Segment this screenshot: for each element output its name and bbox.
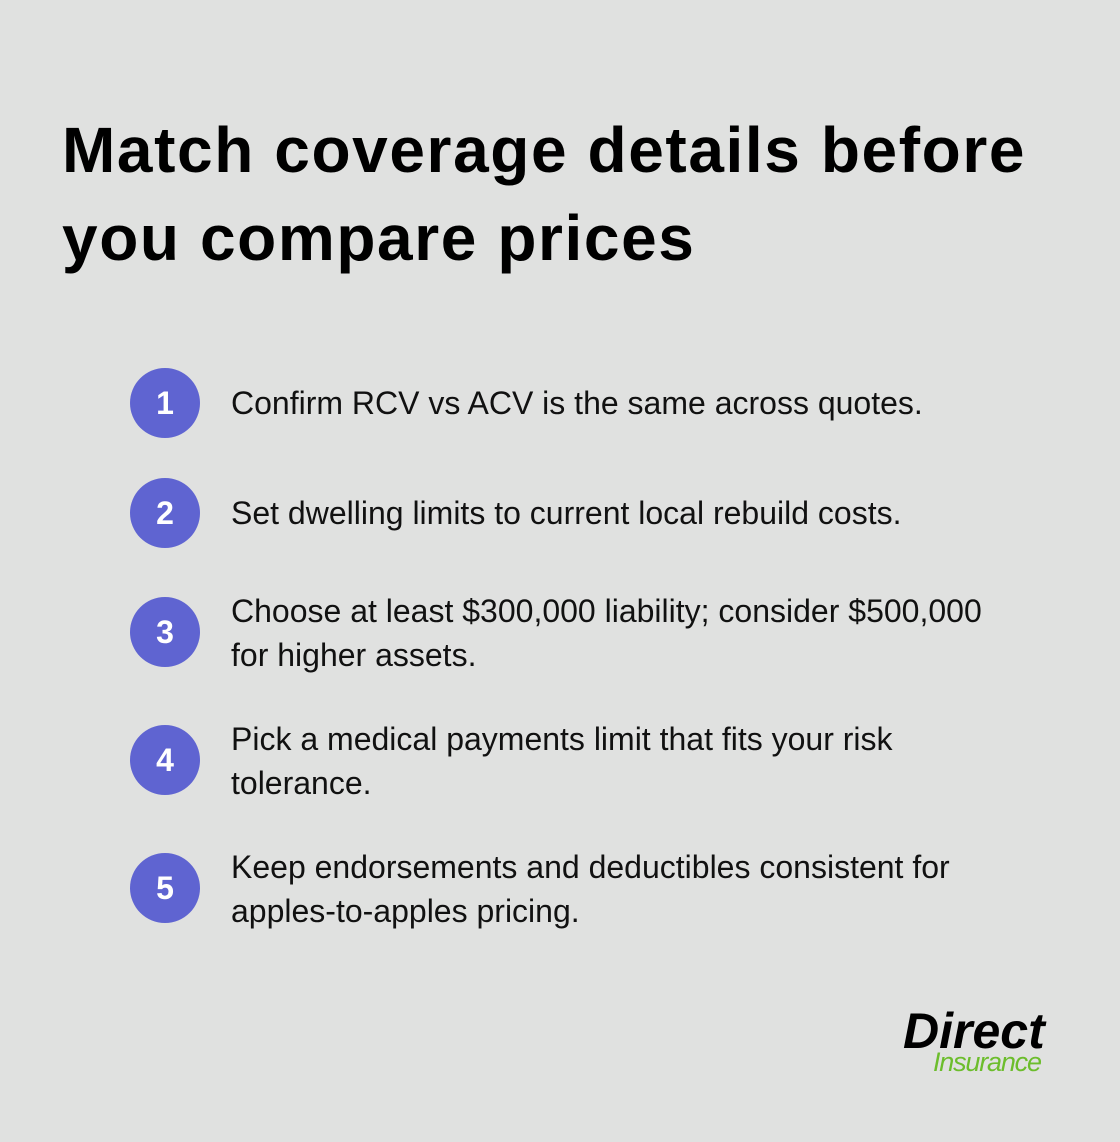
item 5: 5 bbox=[156, 870, 174, 906]
item 3: Choose at least $300,000 liability; consider $500,000 bbox=[231, 593, 982, 629]
item 4: tolerance. bbox=[231, 765, 372, 801]
item 2: 2 bbox=[156, 495, 174, 531]
item 4: 4 bbox=[156, 742, 174, 778]
title: Match coverage details before bbox=[62, 114, 1026, 186]
item 3: 3 bbox=[156, 614, 174, 650]
item 1 bbox=[130, 368, 923, 438]
item 5 bbox=[130, 849, 950, 929]
item 5: Keep endorsements and deductibles consistent for bbox=[231, 849, 950, 885]
item 4: Pick a medical payments limit that fits your risk bbox=[231, 721, 893, 757]
item 3 bbox=[130, 593, 982, 673]
item 3: for higher assets. bbox=[231, 637, 476, 673]
title bbox=[62, 114, 1026, 274]
logo: Insurance bbox=[933, 1047, 1041, 1077]
item 4 bbox=[130, 721, 893, 801]
item 2: Set dwelling limits to current local rebuild costs. bbox=[231, 495, 902, 531]
item 1: 1 bbox=[156, 385, 174, 421]
logo: Direct bbox=[903, 1003, 1045, 1059]
item 1: Confirm RCV vs ACV is the same across quotes. bbox=[231, 385, 923, 421]
title: you compare prices bbox=[62, 202, 696, 274]
item 5: apples-to-apples pricing. bbox=[231, 893, 580, 929]
item 2 bbox=[130, 478, 902, 548]
